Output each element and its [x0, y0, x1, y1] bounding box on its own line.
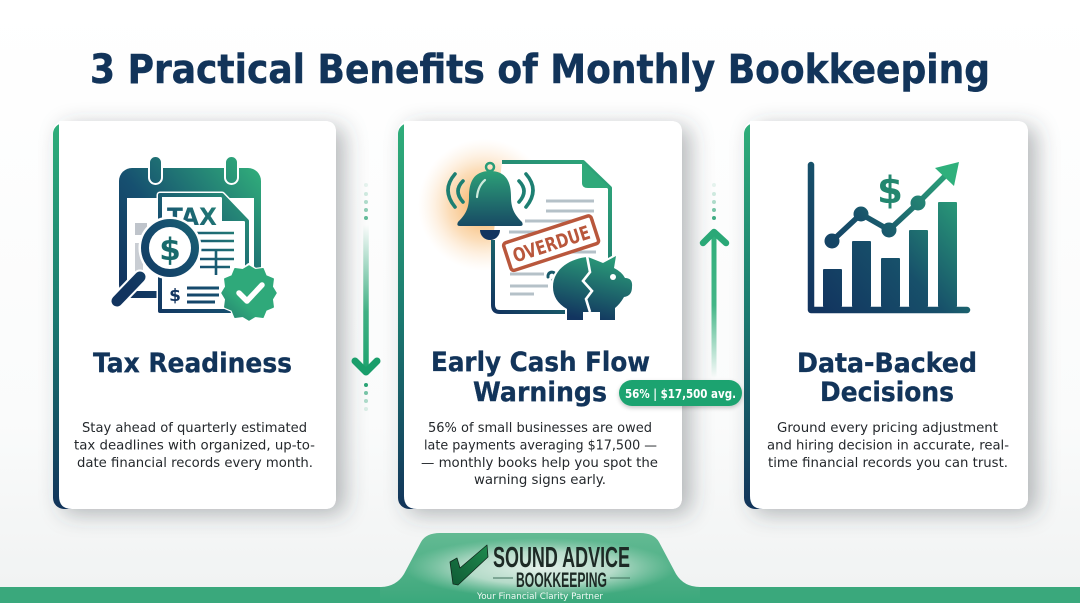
text block: data-backed decisions	[767, 420, 1009, 471]
text block: data-backed decisions: Ground every pricing adjustment	[777, 420, 998, 436]
arrow: down	[355, 183, 377, 411]
logo wordmark: BOOKKEEPING	[516, 569, 607, 592]
icon: check mark	[450, 545, 488, 585]
icon: tax calendar	[117, 156, 277, 321]
text block: early cash flow warnings: 56% of small businesses are owed	[428, 420, 652, 436]
logo wordmark: SOUND ADVICE	[493, 542, 630, 574]
icon: tax calendar: $	[169, 286, 181, 306]
heading: early cash flow warnings	[431, 347, 650, 408]
arrow: up	[703, 183, 726, 378]
text block: early cash flow warnings	[421, 420, 658, 488]
text block: early cash flow warnings: warning signs early.	[474, 472, 606, 488]
text block: tax readiness: Stay ahead of quarterly estimated	[82, 420, 307, 436]
heading: early cash flow warnings: Early Cash Flow	[431, 347, 650, 378]
icon: bell, overdue invoice and broken piggy bank: OVERDUE	[510, 222, 593, 267]
icon: growth chart: $	[877, 169, 903, 212]
text block: tax readiness: date financial records every month.	[77, 455, 313, 471]
panel: early cash flow warnings	[398, 121, 682, 509]
callout: statistic pill: 56% | $17,500 avg.	[625, 386, 736, 401]
text block: tax readiness: tax deadlines with organized, up-to-	[74, 438, 315, 454]
heading: data-backed decisions: Decisions	[820, 377, 954, 408]
heading: data-backed decisions	[797, 348, 977, 408]
icon: tax calendar: TAX	[167, 203, 217, 231]
heading: early cash flow warnings: Warnings	[473, 377, 607, 408]
text block: data-backed decisions: and hiring decision in accurate, real-	[767, 438, 1009, 454]
text block: early cash flow warnings: — monthly books help you spot the	[421, 455, 658, 471]
tagline: Your Financial Clarity Partner	[476, 592, 603, 602]
footer logo tab	[380, 533, 700, 603]
heading: data-backed decisions: Data-Backed	[797, 348, 977, 379]
panel: data-backed decisions	[744, 121, 1028, 509]
footer band	[0, 587, 1080, 603]
text block: data-backed decisions: time financial records you can trust.	[768, 455, 1008, 471]
text block: early cash flow warnings: late payments averaging $17,500 —	[424, 438, 657, 454]
icon: bell, overdue invoice and broken piggy bank	[418, 139, 632, 320]
icon: tax calendar: $	[159, 232, 181, 268]
icon: growth chart	[811, 162, 967, 310]
logo wordmark	[493, 542, 630, 592]
callout: statistic pill	[619, 380, 742, 406]
title: 3 Practical Benefits of Monthly Bookkeeping	[90, 47, 990, 93]
panel: tax readiness	[53, 121, 336, 509]
text block: tax readiness	[74, 420, 315, 471]
heading: tax readiness: Tax Readiness	[93, 348, 292, 379]
